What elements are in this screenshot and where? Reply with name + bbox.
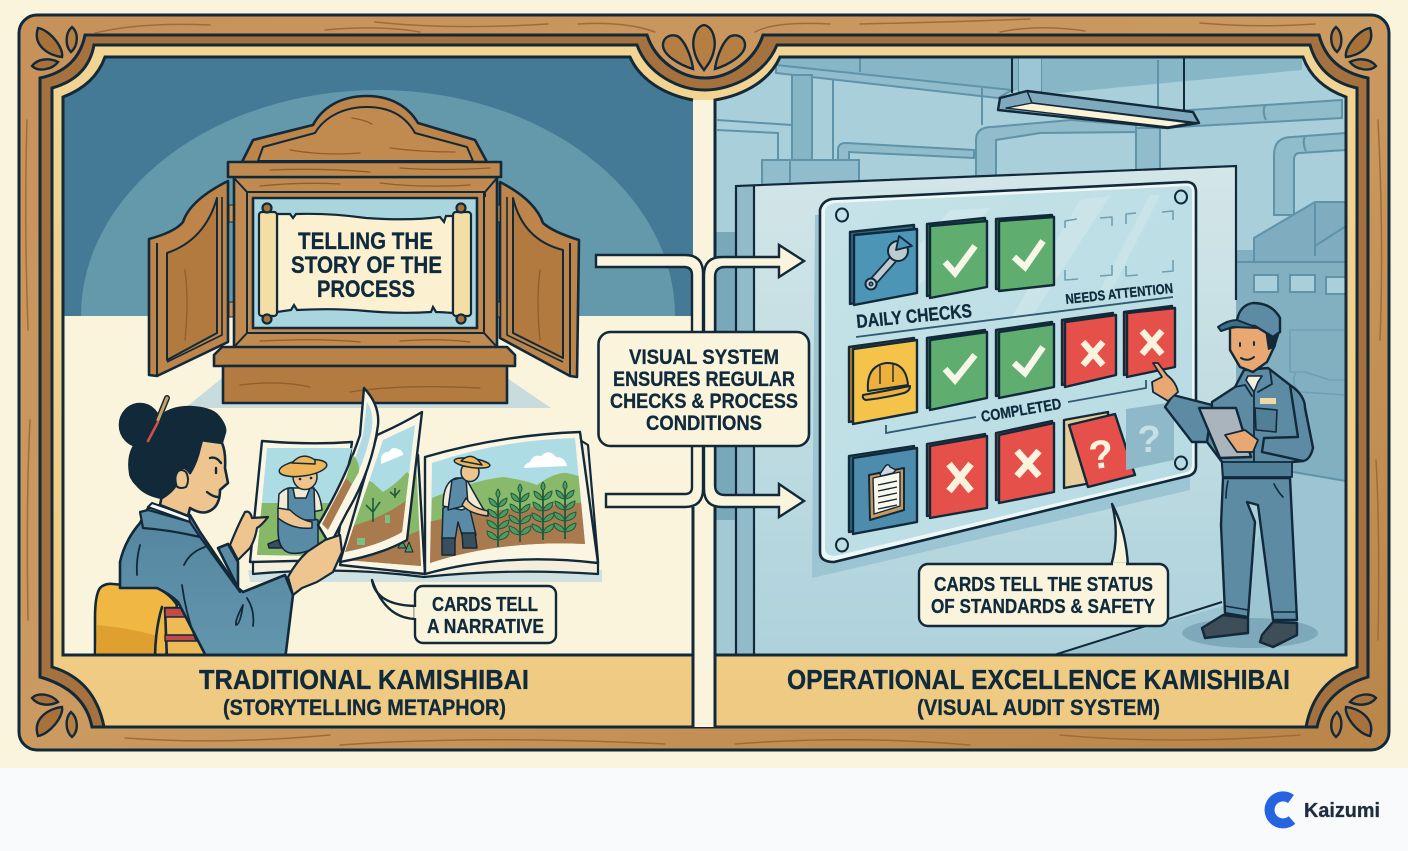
window: [253, 198, 477, 328]
ceiling: [776, 57, 1302, 93]
callout: visual system: VISUAL SYSTEM: [629, 346, 779, 369]
caption: traditional: (STORYTELLING METAPHOR): [223, 695, 506, 720]
corner ornament: top right: [1331, 27, 1376, 69]
completed label: COMPLETED: [980, 396, 1063, 426]
corner ornament: top left: [32, 27, 77, 69]
neck and face: [160, 440, 228, 516]
turning page: [318, 388, 378, 545]
floor: [1054, 472, 1346, 655]
ghost question card: ?: [1137, 419, 1161, 461]
face details: [1240, 342, 1254, 360]
under page: [340, 455, 425, 574]
left roller: [259, 204, 277, 324]
caption: operational excellence: OPERATIONAL EXCELLENCE KAMISHIBAI: [787, 664, 1290, 695]
wrench card: [850, 225, 917, 305]
yellow bag: [94, 582, 204, 654]
left pillar: [715, 232, 736, 520]
ceiling cables: [1012, 57, 1184, 112]
caption: operational excellence: (VISUAL AUDIT SYSTEM): [917, 695, 1160, 720]
glow arc: [81, 90, 675, 316]
panel: traditional kamishibai: [63, 57, 693, 660]
robe: [120, 505, 293, 660]
scroll banner: [259, 204, 471, 324]
board shadow: [812, 195, 1190, 578]
right roller: [453, 204, 471, 324]
green check card: [996, 322, 1054, 398]
factory background: [715, 57, 1346, 655]
callout: visual system: CHECKS & PROCESS: [610, 390, 798, 413]
plants: [487, 481, 576, 547]
callout: visual system: [598, 332, 809, 446]
green check card: [927, 330, 987, 410]
wall panel: [736, 166, 1236, 655]
kamishibai stage: [149, 96, 579, 403]
logo: kaizumi: [1270, 796, 1380, 823]
daily checks label: DAILY CHECKS: [855, 301, 973, 333]
label dividers: [856, 297, 1173, 433]
picture book: [248, 388, 602, 582]
acrylic board: [820, 182, 1196, 562]
callout: cards tell status: [919, 504, 1168, 626]
jacket: [1207, 368, 1313, 477]
scroll text: PROCESS: [317, 276, 415, 303]
cap: [1234, 303, 1280, 337]
arrow: top left connector: [596, 255, 703, 334]
callout: cards tell a narrative: [372, 580, 556, 643]
scroll text: STORY OF THE: [291, 252, 442, 279]
factory pipes and beams: [717, 57, 1346, 215]
top bar: [228, 162, 501, 177]
corner ornament: bottom right: [1331, 695, 1376, 737]
needs attention label: NEEDS ATTENTION: [1065, 280, 1174, 307]
far sleeve: [218, 544, 238, 588]
ceiling lamp: [998, 91, 1199, 128]
crown: [242, 96, 487, 162]
head: [1230, 322, 1275, 372]
red x card: [927, 434, 987, 518]
center strip: [63, 57, 1346, 727]
footer band: [0, 768, 1408, 851]
farmer kneeling: [268, 456, 328, 553]
pocket and badge: [1255, 408, 1277, 432]
callout: cards tell a narrative: A NARRATIVE: [427, 616, 544, 638]
panel: operational excellence kamishibai: [715, 57, 1348, 655]
board labels: [855, 280, 1174, 433]
arrow: top right connector: [704, 245, 804, 334]
hair: [1265, 330, 1280, 350]
right page: [425, 432, 598, 574]
status cards: [849, 211, 1175, 534]
callout: visual system: ENSURES REGULAR: [613, 368, 795, 391]
callout: cards tell status: CARDS TELL THE STATUS: [934, 574, 1153, 596]
red x card: [1062, 313, 1116, 387]
base: [223, 366, 507, 403]
inspector worker: [1152, 303, 1318, 648]
right door: [495, 182, 579, 377]
left page: [250, 441, 352, 562]
raised arm: [1165, 395, 1212, 442]
pointing hand: [1152, 363, 1178, 401]
eye brow mouth: [207, 458, 221, 497]
arrow: bottom left connector: [606, 444, 703, 507]
floor: [63, 316, 693, 656]
tablet: [1199, 408, 1251, 458]
wood grain: [185, 118, 540, 392]
right hand: [288, 535, 342, 595]
stage shadow: [185, 378, 551, 408]
logo: kaizumi: Kaizumi: [1304, 799, 1380, 822]
hard hat card: [849, 338, 917, 424]
green check card: [996, 215, 1054, 291]
far arm: [1262, 385, 1313, 461]
caption: traditional: TRADITIONAL KAMISHIBAI: [199, 664, 529, 695]
shoes: [1202, 615, 1297, 647]
left door: [149, 181, 234, 376]
scroll text: TELLING THE: [298, 228, 433, 255]
ear: [175, 470, 188, 488]
left hand: [230, 512, 268, 560]
red x card: [1124, 306, 1175, 377]
callout: visual system: CONDITIONS: [646, 412, 762, 435]
mounting screws: [836, 190, 1187, 552]
flipped question card: ?: [1087, 432, 1115, 478]
caption: operational excellence: [787, 664, 1290, 720]
callout: cards tell status: OF STANDARDS & SAFETY: [931, 596, 1156, 618]
arrow: bottom right connector: [704, 444, 804, 517]
hair: [129, 407, 225, 498]
pants: [1221, 478, 1297, 620]
sky background: [63, 57, 693, 316]
scroll text: [292, 232, 442, 298]
center top ornament: [663, 25, 745, 70]
callout: cards tell a narrative: CARDS TELL: [432, 594, 538, 616]
red x card: [996, 421, 1054, 503]
ground shadow: [1182, 618, 1318, 648]
green check card: [927, 218, 987, 298]
holding hand: [1225, 430, 1258, 452]
flipped question card: [1064, 412, 1135, 488]
machinery: [1236, 202, 1348, 480]
ghost question card: [1126, 402, 1174, 470]
curled page: [340, 412, 422, 562]
hair bun: [120, 404, 160, 446]
woman storyteller: [95, 398, 342, 660]
farmer standing: [442, 456, 490, 555]
caption: traditional: [199, 664, 529, 720]
clipboard card: [849, 446, 917, 534]
bottom ledge: [214, 347, 515, 366]
empty card slots: [1065, 211, 1173, 280]
hair stick: [148, 398, 167, 441]
cabinet frame: [234, 177, 497, 348]
corner ornament: bottom left: [32, 695, 77, 737]
